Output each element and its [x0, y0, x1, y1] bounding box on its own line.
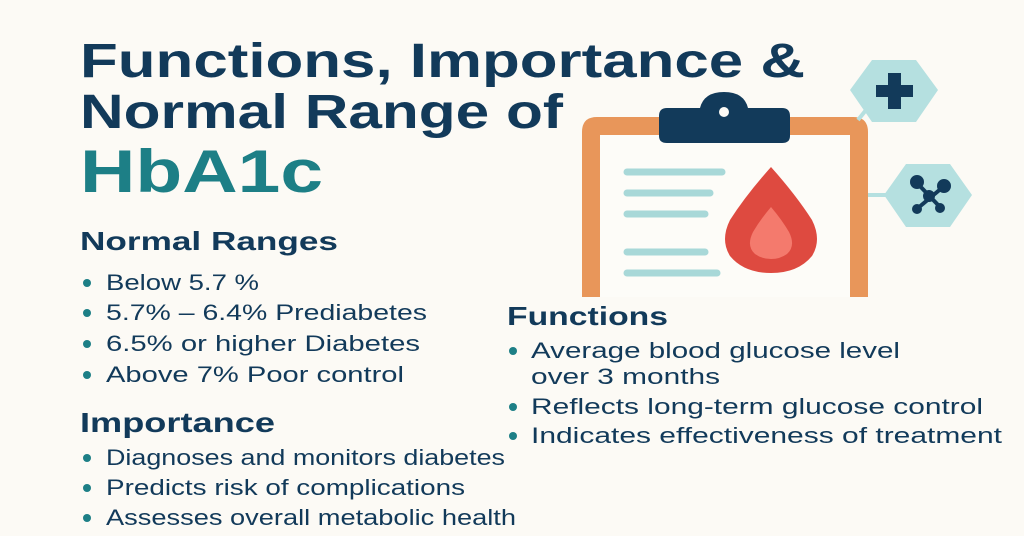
panel: functions: Reflects long-term glucose control — [531, 394, 983, 419]
panel: functions: Indicates effectiveness of treatment — [531, 423, 1002, 448]
panel: normal ranges — [80, 226, 427, 387]
icon: clipboard with blood drop — [582, 92, 868, 297]
panel: importance: Importance — [80, 407, 275, 438]
icon: molecule hexagon — [868, 164, 972, 227]
icon: plus hexagon — [850, 60, 938, 122]
panel: importance: Predicts risk of complications — [106, 475, 465, 500]
panel: functions: Functions — [507, 301, 668, 331]
panel: normal ranges: Below 5.7 % — [106, 270, 259, 295]
panel: importance — [80, 407, 516, 530]
panel: normal ranges: Normal Ranges — [80, 226, 338, 256]
panel: importance: Diagnoses and monitors diabetes — [106, 445, 505, 470]
panel: functions — [507, 301, 1002, 448]
panel: functions: Average blood glucose level — [531, 338, 900, 363]
panel: functions: over 3 months — [531, 364, 720, 389]
title — [80, 35, 805, 205]
panel: importance: Assesses overall metabolic health — [106, 505, 516, 530]
title: Functions, Importance & — [80, 35, 805, 88]
panel: normal ranges: 5.7% – 6.4% Prediabetes — [106, 300, 427, 325]
title: HbA1c — [80, 138, 323, 205]
panel: normal ranges: Above 7% Poor control — [106, 362, 404, 387]
title: Normal Range of — [80, 86, 564, 139]
panel: normal ranges: 6.5% or higher Diabetes — [106, 331, 420, 356]
